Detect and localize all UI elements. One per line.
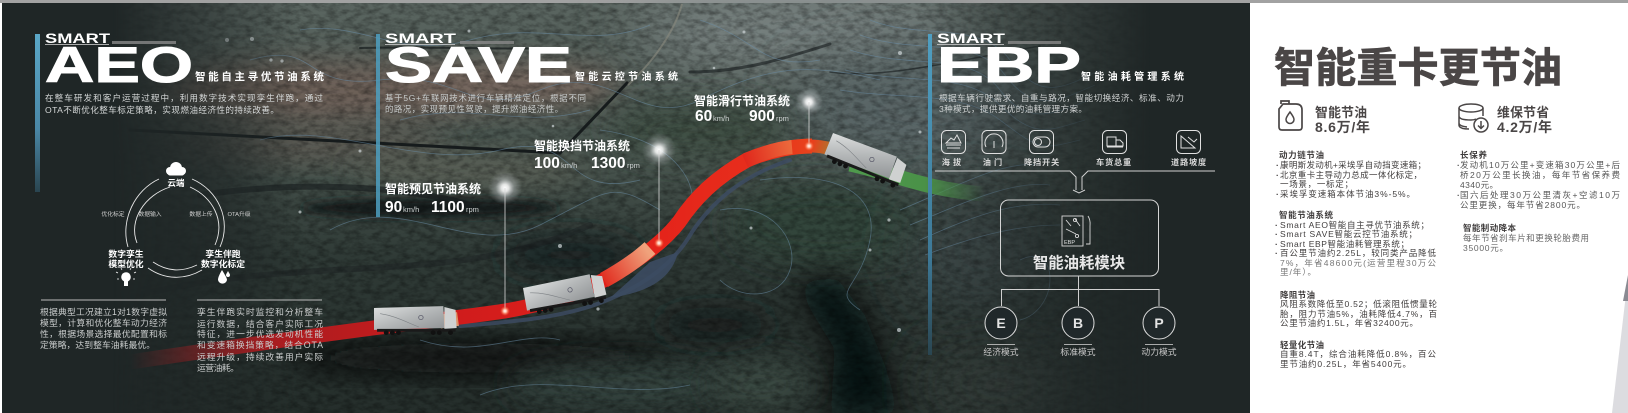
cycle labels: 数据上传 xyxy=(189,210,213,218)
text: long maintenance: 4340元。 xyxy=(1460,180,1498,190)
dark panel xyxy=(2,3,1250,413)
corner decoration xyxy=(1612,275,1628,413)
text: intelligent systems: 智能节油系统 xyxy=(1279,210,1333,220)
route: red to green fuel-saving ribbon xyxy=(130,146,985,362)
text block: digital model: 性，根据场景选择最优配置和标 xyxy=(40,328,167,339)
text: drivetrain savings xyxy=(1276,150,1426,199)
mode P xyxy=(1141,307,1177,357)
text: drag reduction: 胎，阻力节油5%，油耗降低4.7%，百 xyxy=(1280,309,1437,319)
mode P: 动力模式 xyxy=(1141,346,1177,357)
callout: predictive system: 90 xyxy=(385,199,402,216)
text: drag reduction: 降阻节油 xyxy=(1280,290,1315,300)
callout: predictive system: km/h xyxy=(403,205,419,214)
AEO heading block: SMART xyxy=(45,31,111,46)
text: drivetrain savings: 一场景，一标定； xyxy=(1280,179,1353,189)
SAVE heading block: 智能云控节油系统 xyxy=(575,70,678,83)
icon: cloud xyxy=(166,162,186,176)
mode tree xyxy=(983,276,1177,357)
text: long maintenance: 发动机10万公里+变速箱30万公里+后 xyxy=(1460,160,1620,170)
text: braking cost: 智能制动降本 xyxy=(1463,223,1516,233)
cycle labels: 云端 xyxy=(167,178,185,188)
callout: predictive system: 智能预见节油系统 xyxy=(385,181,481,196)
fuel saving stat: 8.6万/年 xyxy=(1315,119,1370,135)
AEO heading block: OTA不断优化整车标定策略，实现燃油经济性的持续改善。 xyxy=(45,104,279,115)
text block: digital model: 模型，计算和优化整车动力经济 xyxy=(40,317,167,328)
truck 1 xyxy=(374,306,457,335)
EBP input icons xyxy=(942,130,1207,167)
contour lines xyxy=(250,20,1100,395)
text: intelligent systems: · xyxy=(1275,248,1278,258)
AEO heading block: 智能自主寻优节油系统 xyxy=(195,70,324,83)
mode E: 经济模式 xyxy=(983,346,1019,357)
text: intelligent systems xyxy=(1275,210,1436,277)
callout: gear shift system: 100 xyxy=(534,155,560,172)
cycle labels: 数字化标定 xyxy=(201,258,245,269)
text: drivetrain savings: · xyxy=(1276,170,1279,180)
callout: predictive system: 1100 xyxy=(431,199,465,216)
mode E xyxy=(983,307,1019,357)
smart fuel module box xyxy=(1000,200,1158,276)
text: lightweight: 自重8.4T，综合油耗降低0.8%，百公 xyxy=(1280,349,1436,359)
SAVE heading block: 的路况，实现预见性驾驶，提升燃油经济性。 xyxy=(385,104,563,114)
EBP heading block: SMART xyxy=(937,31,1006,46)
callout: coasting system: km/h xyxy=(713,114,729,123)
text: long maintenance: 国六后处理30万公里清灰+空滤10万 xyxy=(1460,190,1620,200)
terrain photograph background xyxy=(139,0,1118,413)
text: intelligent systems: · xyxy=(1275,229,1278,239)
callout: coasting system xyxy=(694,88,823,151)
maintenance saving stat: 维保节省 xyxy=(1497,105,1549,120)
dark road lines in terrain xyxy=(120,44,1040,300)
callout: predictive system: rpm xyxy=(466,205,479,214)
callout: gear shift system: rpm xyxy=(627,161,640,170)
icon: EBP circuit xyxy=(1062,216,1090,246)
maintenance saving stat: 4.2万/年 xyxy=(1497,119,1552,135)
icon: database download xyxy=(1459,104,1488,132)
text: lightweight xyxy=(1280,340,1436,369)
AEO heading block: AEO xyxy=(45,37,193,93)
text: intelligent systems: 百公里节油约2.25L，较同类产品降低 xyxy=(1280,248,1436,258)
cycle arcs xyxy=(126,179,224,277)
cycle labels: 模型优化 xyxy=(108,258,144,269)
input labels: 车货总重 xyxy=(1096,157,1132,167)
text: braking cost: 35000元。 xyxy=(1463,243,1508,253)
text: drivetrain savings: 康明斯发动机+采埃孚自动挡变速箱； xyxy=(1280,160,1426,170)
text: intelligent systems: 里/年）。 xyxy=(1280,267,1316,277)
mode P: P xyxy=(1154,315,1164,331)
EBP heading block: 根据车辆行驶需求、自重与路况，智能切换经济、标准、动力 xyxy=(939,92,1184,103)
maintenance saving stat xyxy=(1459,104,1552,135)
EBP heading block: 3种模式，提供更优的油耗管理方案。 xyxy=(939,103,1087,114)
AEO heading block: 在整车研发和客户运营过程中，利用数字技术实现孪生伴跑，通过 xyxy=(45,92,323,103)
callout: gear shift system: km/h xyxy=(561,161,577,170)
text: drag reduction: 公里节油约1.5L，年省32400元。 xyxy=(1280,318,1418,328)
middle accent bar xyxy=(376,34,380,217)
EBP heading block: 智能油耗管理系统 xyxy=(1081,70,1184,83)
text: drivetrain savings: · xyxy=(1276,160,1279,170)
cycle labels: 数字孪生 xyxy=(108,248,144,259)
EBP heading block xyxy=(937,31,1184,114)
text block: digital twin xyxy=(197,300,323,373)
text block: digital twin: 和变速箱换挡策略，结合OTA xyxy=(197,339,323,350)
text block: digital twin: 孪生伴跑实时监控和分析整车 xyxy=(197,306,323,317)
mode B: 标准模式 xyxy=(1060,346,1096,357)
callout: gear shift system xyxy=(534,133,676,248)
input labels xyxy=(942,157,1207,167)
input labels: 降挡开关 xyxy=(1024,157,1060,167)
text: long maintenance: 公里更换，每年节省2800元。 xyxy=(1460,200,1585,210)
icon: downshift switch xyxy=(1030,130,1054,154)
icon: jerrycan xyxy=(1279,101,1302,130)
text: drivetrain savings: 动力链节油 xyxy=(1279,150,1324,160)
callout: gear shift system: 智能换挡节油系统 xyxy=(534,138,630,153)
cycle labels: 数据输入 xyxy=(138,210,162,218)
text: long maintenance: · xyxy=(1457,160,1460,170)
text: long maintenance: 桥20万公里长换油，每年节省保养费 xyxy=(1460,170,1620,180)
text: drivetrain savings: 北京重卡主导动力总成一体化标定， xyxy=(1280,170,1422,180)
callout: coasting system: 60 xyxy=(695,108,712,125)
text: intelligent systems: · xyxy=(1275,239,1278,249)
text: drag reduction: 风阻系数降低至0.52；低滚阻低惯量轮 xyxy=(1280,299,1437,309)
mode B xyxy=(1060,307,1096,357)
SAVE heading block xyxy=(385,31,678,114)
fuel saving stat: 智能节油 xyxy=(1315,105,1367,120)
callout: coasting system: 智能滑行节油系统 xyxy=(694,93,790,108)
input labels: 海拔 xyxy=(942,157,964,167)
cycle diagram xyxy=(101,162,251,286)
text: drag reduction xyxy=(1280,290,1437,328)
mode B: B xyxy=(1073,315,1083,331)
text: intelligent systems: Smart SAVE智能云控节油系统； xyxy=(1280,229,1417,239)
left accent bar xyxy=(35,34,40,192)
input labels: 油门 xyxy=(983,157,1005,167)
SAVE heading block: SMART xyxy=(385,31,457,46)
SAVE heading block: SAVE xyxy=(385,37,572,93)
text: long maintenance: · xyxy=(1457,190,1460,200)
white survey dots xyxy=(225,30,922,332)
text: intelligent systems: 7%，年省48600元(运营里程30万公 xyxy=(1280,258,1436,268)
top grey strip xyxy=(0,0,1628,3)
text: braking cost: 每年节省刹车片和更换轮胎费用 xyxy=(1463,233,1589,243)
route: slate service road xyxy=(460,160,790,326)
callout: predictive system xyxy=(385,171,522,316)
fuel saving stat xyxy=(1279,101,1370,135)
icon: EBP circuit: EBP xyxy=(1064,240,1075,246)
icon: gross weight xyxy=(1102,130,1126,154)
text block: digital twin: 运行数据，结合客户实际工况 xyxy=(197,318,323,329)
truck 2 xyxy=(523,272,608,316)
right panel title: 智能重卡更节油 xyxy=(1274,45,1562,91)
callout: coasting system: 900 xyxy=(749,108,775,125)
input labels: 道路坡度 xyxy=(1171,157,1207,167)
text block: digital model: 根据典型工况建立1对1数字虚拟 xyxy=(40,306,167,317)
cycle labels: OTA升级 xyxy=(227,210,251,218)
text block: digital model: 定策略，达到整车油耗最优。 xyxy=(40,339,155,350)
icon: oil drops xyxy=(218,270,230,284)
text block: digital twin: 远程升级，持续改善用户实际 xyxy=(197,351,323,362)
callout: gear shift system: 1300 xyxy=(591,155,625,172)
text: drivetrain savings: 采埃孚变速箱本体节油3%-5%。 xyxy=(1280,189,1415,199)
text: long maintenance: 长保养 xyxy=(1460,150,1487,160)
cycle labels: 孪生伴跑 xyxy=(205,248,241,259)
text: intelligent systems: Smart EBP智能油耗管理系统； xyxy=(1280,239,1409,249)
text: long maintenance xyxy=(1457,150,1620,210)
cycle labels xyxy=(101,178,251,269)
icon: light bulb xyxy=(116,268,136,286)
text: intelligent systems: Smart AEO智能自主寻优节油系统； xyxy=(1280,220,1429,230)
EBP heading block: EBP xyxy=(937,37,1081,93)
merge arrow xyxy=(935,171,1215,193)
icon: road gradient xyxy=(1176,130,1200,154)
text: lightweight: 里节油约0.25L，年省5400元。 xyxy=(1280,359,1411,369)
text: drivetrain savings: · xyxy=(1276,189,1279,199)
AEO heading block xyxy=(45,31,324,115)
text: intelligent systems: · xyxy=(1275,220,1278,230)
truck 3 xyxy=(822,131,909,190)
text block: digital twin: 运营油耗。 xyxy=(197,362,239,373)
text: lightweight: 轻量化节油 xyxy=(1280,340,1324,350)
icon: altitude xyxy=(942,130,966,154)
text: braking cost xyxy=(1463,223,1589,253)
mode E: E xyxy=(996,315,1006,331)
smart fuel module box: 智能油耗模块 xyxy=(1033,253,1125,272)
text block: digital model xyxy=(40,300,167,350)
callout: coasting system: rpm xyxy=(776,114,789,123)
text block: digital twin: 特征，进一步优选发动机性能 xyxy=(197,328,323,339)
cycle labels: 优化标定 xyxy=(101,210,125,218)
icon: throttle xyxy=(982,130,1006,154)
SAVE heading block: 基于5G+车联网技术进行车辆精准定位，根据不同 xyxy=(385,93,586,103)
right accent bar xyxy=(928,34,932,355)
